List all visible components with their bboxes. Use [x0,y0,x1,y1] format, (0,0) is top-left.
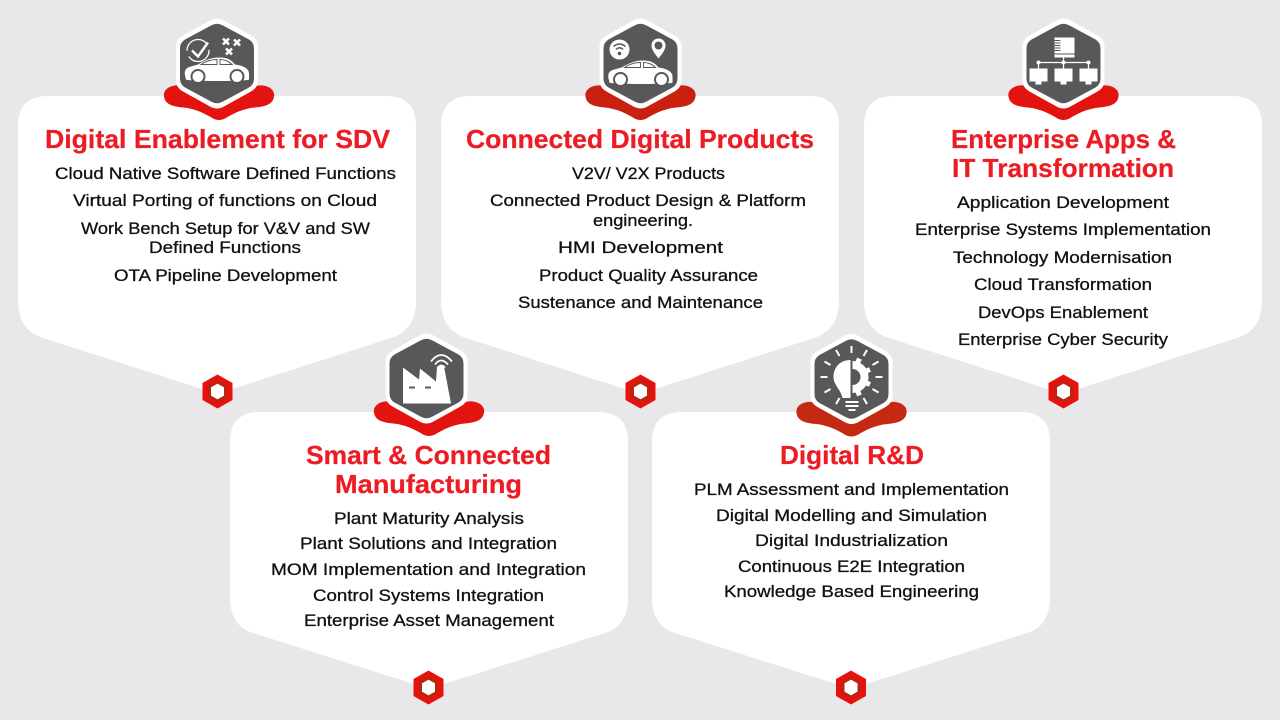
service list: Connected Product Design & Platform [490,191,806,210]
service list: Enterprise Asset Management [304,611,554,630]
service list: Continuous E2E Integration [738,557,965,576]
service list: HMI Development [558,238,723,257]
heading: Smart & Connected [306,440,551,470]
service list: OTA Pipeline Development [114,266,337,285]
service list: Plant Solutions and Integration [300,534,557,553]
service list: Digital Modelling and Simulation [716,506,987,525]
service list: Enterprise Systems Implementation [915,220,1211,239]
service list: Sustenance and Maintenance [518,293,763,312]
heading: Enterprise Apps & [951,124,1176,154]
icon: connected car [585,18,696,120]
panel: Enterprise Apps & IT Transformation [864,18,1262,408]
card shape [652,412,1050,686]
panel: Digital R&D [652,334,1050,704]
service list [55,164,396,285]
icon: smart factory [374,334,484,436]
marker hexagon [836,670,866,704]
marker hexagon [414,670,444,704]
service list: DevOps Enablement [978,303,1148,322]
panel: Digital Enablement for SDV [18,18,416,408]
service list: PLM Assessment and Implementation [694,480,1009,499]
service list: Defined Functions [149,238,301,257]
service list: Product Quality Assurance [539,266,758,285]
heading: Digital Enablement for SDV [45,124,391,154]
service list: Cloud Native Software Defined Functions [55,164,396,183]
card shape [864,96,1262,392]
card shape [441,96,839,392]
service list: Technology Modernisation [953,248,1172,267]
heading: Connected Digital Products [466,124,814,154]
service list: Enterprise Cyber Security [958,330,1169,349]
service list: Digital Industrialization [755,531,948,550]
panel: Smart & Connected Manufacturing [230,334,628,704]
service list [694,480,1009,601]
service list: Cloud Transformation [974,275,1152,294]
service list: V2V/ V2X Products [572,164,725,183]
service list: MOM Implementation and Integration [271,560,586,579]
icon: car with check badge [164,18,274,120]
icon: bulb and gear [796,334,907,436]
service list: Control Systems Integration [313,586,544,605]
service list: Knowledge Based Engineering [724,582,979,601]
heading line 2: Manufacturing [335,469,522,499]
icon: network tree [1008,18,1119,120]
service list: Virtual Porting of functions on Cloud [73,191,377,210]
service list: engineering. [593,211,693,230]
marker hexagon [1048,374,1078,408]
card shape [230,412,628,686]
service list [271,509,586,630]
marker hexagon [626,374,656,408]
marker hexagon [202,374,232,408]
service list [915,193,1211,349]
card shape [18,96,416,392]
service list: Application Development [957,193,1169,212]
heading: Digital R&D [780,440,924,470]
service list: Plant Maturity Analysis [334,509,524,528]
heading line 2: IT Transformation [952,153,1174,183]
service list: Work Bench Setup for V&V and SW [81,219,370,238]
service list [490,164,806,312]
panel: Connected Digital Products [441,18,839,408]
